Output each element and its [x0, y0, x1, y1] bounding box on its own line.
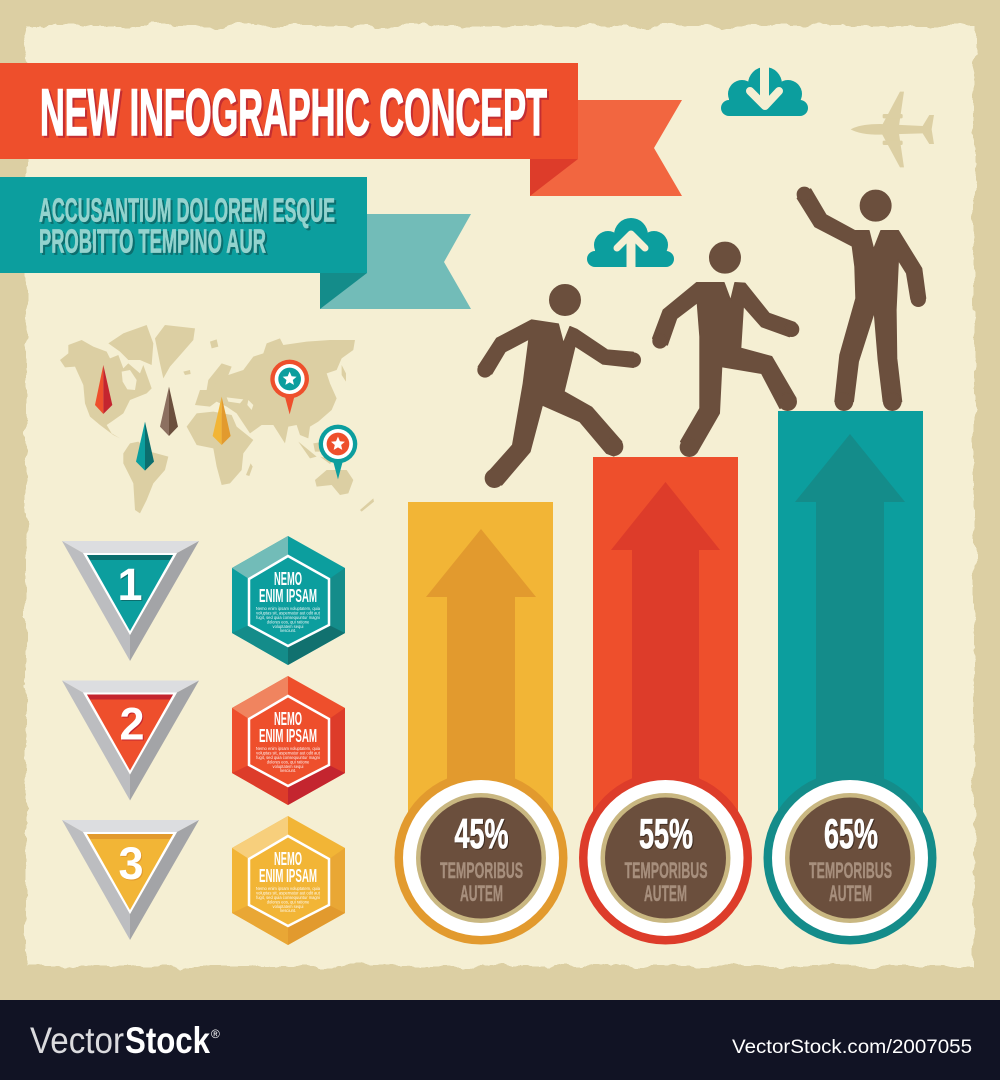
arrow: [426, 529, 536, 840]
hexagon text: dolores eos, qui ratione: [267, 900, 310, 904]
bar column 45%: [394, 502, 568, 944]
image id: VectorStock.com/2007055: [732, 1036, 972, 1058]
hexagon text: fugit, sed quia consequuntur magni: [256, 615, 320, 620]
icon: download cloud: [721, 65, 808, 116]
hexagon text: fugit, sed quia consequuntur magni: [256, 895, 320, 900]
triangle badge 3: [62, 820, 199, 940]
subtitle ribbon: [0, 177, 471, 309]
subtitle: [39, 192, 335, 260]
hexagon text: voluptas sit, aspernatur aut odit aut: [256, 610, 321, 616]
world map: [60, 325, 374, 513]
map pin: brown: [160, 387, 178, 436]
figure: top person: [797, 187, 926, 410]
icon: airplane: [851, 92, 934, 167]
percentage badge: TEMPORIBUS: [440, 858, 523, 883]
hexagon text: Nemo enim ipsam voluptatem, quia: [256, 886, 321, 891]
triangle badge 1: [62, 541, 199, 661]
hexagon text: ENIM IPSAM: [259, 866, 317, 886]
percentage badge: AUTEM: [460, 881, 503, 906]
map pin: star red: [270, 360, 309, 414]
percentage badge: 55%: [639, 810, 693, 857]
hexagon text: Nemo enim ipsam voluptatem, quia: [256, 606, 321, 611]
hexagon text: [256, 709, 321, 773]
figure: running person: [478, 285, 640, 487]
hexagon text: ENIM IPSAM: [259, 586, 317, 606]
number 1: 1: [117, 559, 143, 610]
bar column 55%: [579, 457, 752, 944]
logo: [30, 1020, 220, 1061]
percentage badge: AUTEM: [829, 881, 872, 906]
hexagon text: voluptatem sequi: [273, 624, 304, 629]
percentage badge: [394, 772, 568, 944]
map pin: teal: [136, 422, 154, 471]
hexagon text: voluptatem sequi: [273, 904, 304, 909]
hexagon badge yellow: [232, 816, 345, 945]
percentage badge: TEMPORIBUS: [624, 858, 708, 883]
title: NEW INFOGRAPHIC CONCEPT: [40, 75, 547, 149]
percentage badge: TEMPORIBUS: [809, 858, 892, 883]
hexagon text: nesciunt.: [280, 908, 296, 913]
icon: upload cloud: [587, 218, 674, 268]
hexagon text: NEMO: [274, 709, 302, 729]
hexagon text: NEMO: [274, 849, 302, 869]
hexagon text: dolores eos, qui ratione: [267, 760, 310, 764]
logo: Stock: [125, 1020, 210, 1061]
percentage badge: [764, 772, 936, 944]
hexagon text: Nemo enim ipsam voluptatem, quia: [256, 746, 321, 751]
arrow: [795, 434, 905, 840]
hexagon badge teal: [232, 536, 345, 665]
percentage badge: [579, 772, 752, 944]
number 2: 2: [119, 698, 145, 750]
hexagon text: nesciunt.: [280, 628, 296, 633]
hexagon badge red: [232, 676, 345, 805]
title ribbon: [0, 63, 682, 196]
hexagon text: voluptatem sequi: [273, 764, 304, 769]
number 3: 3: [118, 838, 144, 889]
hexagon text: NEMO: [274, 569, 302, 589]
footer bar: [0, 1000, 1000, 1080]
logo: Vector: [30, 1020, 124, 1061]
hexagon text: ENIM IPSAM: [259, 726, 317, 746]
hexagon text: [256, 849, 321, 913]
percentage badge: AUTEM: [644, 881, 687, 906]
hexagon text: dolores eos, qui ratione: [267, 620, 310, 624]
map pin: red: [95, 365, 112, 414]
arrow: [611, 482, 720, 840]
hexagon text: fugit, sed quia consequuntur magni: [256, 755, 320, 760]
triangle badge 2: [62, 680, 199, 800]
map pin: star teal: [319, 425, 357, 479]
hexagon text: voluptas sit, aspernatur aut odit aut: [256, 890, 321, 896]
hexagon text: voluptas sit, aspernatur aut odit aut: [256, 750, 321, 756]
map pin: yellow: [213, 397, 231, 445]
percentage badge: 65%: [824, 810, 878, 857]
logo: ®: [211, 1027, 220, 1041]
hexagon text: nesciunt.: [280, 768, 296, 773]
bar column 65%: [764, 411, 936, 944]
hexagon text: [256, 569, 321, 633]
subtitle: PROBITTO TEMPINO AUR: [39, 224, 266, 260]
percentage badge: 45%: [454, 810, 508, 857]
figure: stepping person: [653, 242, 799, 456]
subtitle: ACCUSANTIUM DOLOREM ESQUE: [39, 192, 335, 230]
